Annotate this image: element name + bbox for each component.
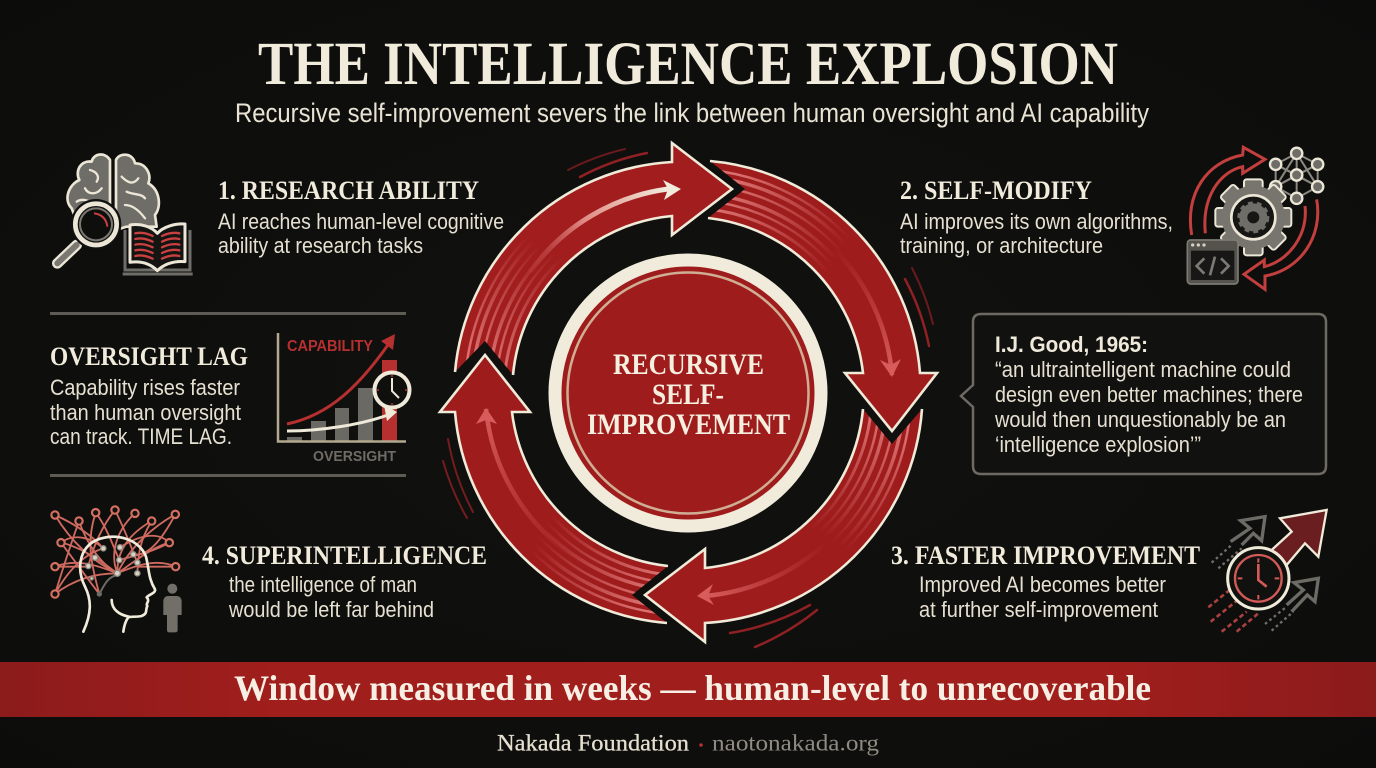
body text: AI improves its own algorithms, [900,209,1173,234]
arrow 4: faster improvement to superintelligence [437,353,668,624]
body text: training, or architecture [900,233,1103,258]
body text: would be left far behind [228,597,434,622]
callout: I.J. Good quote: “an ultraintelligent machine could [995,357,1291,382]
icon: clock with rising arrows [1208,510,1327,632]
center label [587,348,790,441]
icon: gear network code [1187,147,1323,289]
body text: Capability rises faster [50,375,240,400]
panel: step 3 faster improvement [891,510,1327,632]
body text: at further self-improvement [919,597,1158,622]
magnifier [57,245,77,263]
heading: OVERSIGHT LAG [50,342,248,371]
heading: 1. RESEARCH ABILITY [218,176,479,205]
body text: can track. TIME LAG. [50,424,232,449]
footer [497,730,880,756]
motion lines [443,149,933,647]
center label: RECURSIVE [613,348,764,381]
body text: AI reaches human-level cognitive [218,209,504,234]
callout: I.J. Good quote: ‘intelligence explosion’” [995,432,1201,457]
panel: step 2 self-modify [900,147,1323,289]
title: THE INTELLIGENCE EXPLOSION [258,31,1118,98]
body text [919,572,1166,622]
heading: 4. SUPERINTELLIGENCE [202,541,487,570]
arrow 2: research to self-modify [708,160,940,433]
body text [900,209,1173,258]
panel: step 1 research ability [57,155,504,274]
body text [50,375,241,449]
center label: IMPROVEMENT [587,408,790,441]
chart: capability vs oversight: OVERSIGHT [313,449,396,465]
body text: ability at research tasks [218,233,423,258]
icon: head with network and small person [51,506,182,632]
callout: I.J. Good quote: design even better machines; there [995,382,1303,407]
callout: I.J. Good quote: I.J. Good, 1965: [995,332,1148,357]
divider top [50,312,406,315]
heading: 3. FASTER IMPROVEMENT [891,541,1200,570]
panel: oversight lag [50,312,410,477]
footer: naotonakada.org [712,730,880,756]
heading: 2. SELF-MODIFY [900,176,1092,205]
body text: Improved AI becomes better [919,572,1166,597]
banner [0,662,1376,717]
center label: SELF- [652,378,724,411]
banner: Window measured in weeks — human-level to unrecoverable [234,668,1151,708]
callout: I.J. Good quote: would then unquestionably be an [994,407,1286,432]
divider bottom [50,474,406,477]
body text [218,209,504,258]
cycle diagram [440,143,937,647]
icon: brain magnifier book [57,155,193,274]
body text [228,572,434,622]
body text: the intelligence of man [229,572,417,597]
body text: than human oversight [50,400,241,425]
chart: capability vs oversight [278,333,410,465]
arrow 3: self-modify to faster improvement [643,408,924,645]
arrow 1: superintelligence to research [454,140,734,376]
clock [374,372,410,408]
center circle [555,260,821,526]
book [123,230,193,274]
footer: Nakada Foundation [497,730,690,756]
chart: capability vs oversight: CAPABILITY [287,338,374,355]
subtitle: Recursive self-improvement severs the link between human oversight and AI capability [235,98,1150,128]
callout: I.J. Good quote [961,314,1326,474]
panel: step 4 superintelligence [51,506,487,632]
